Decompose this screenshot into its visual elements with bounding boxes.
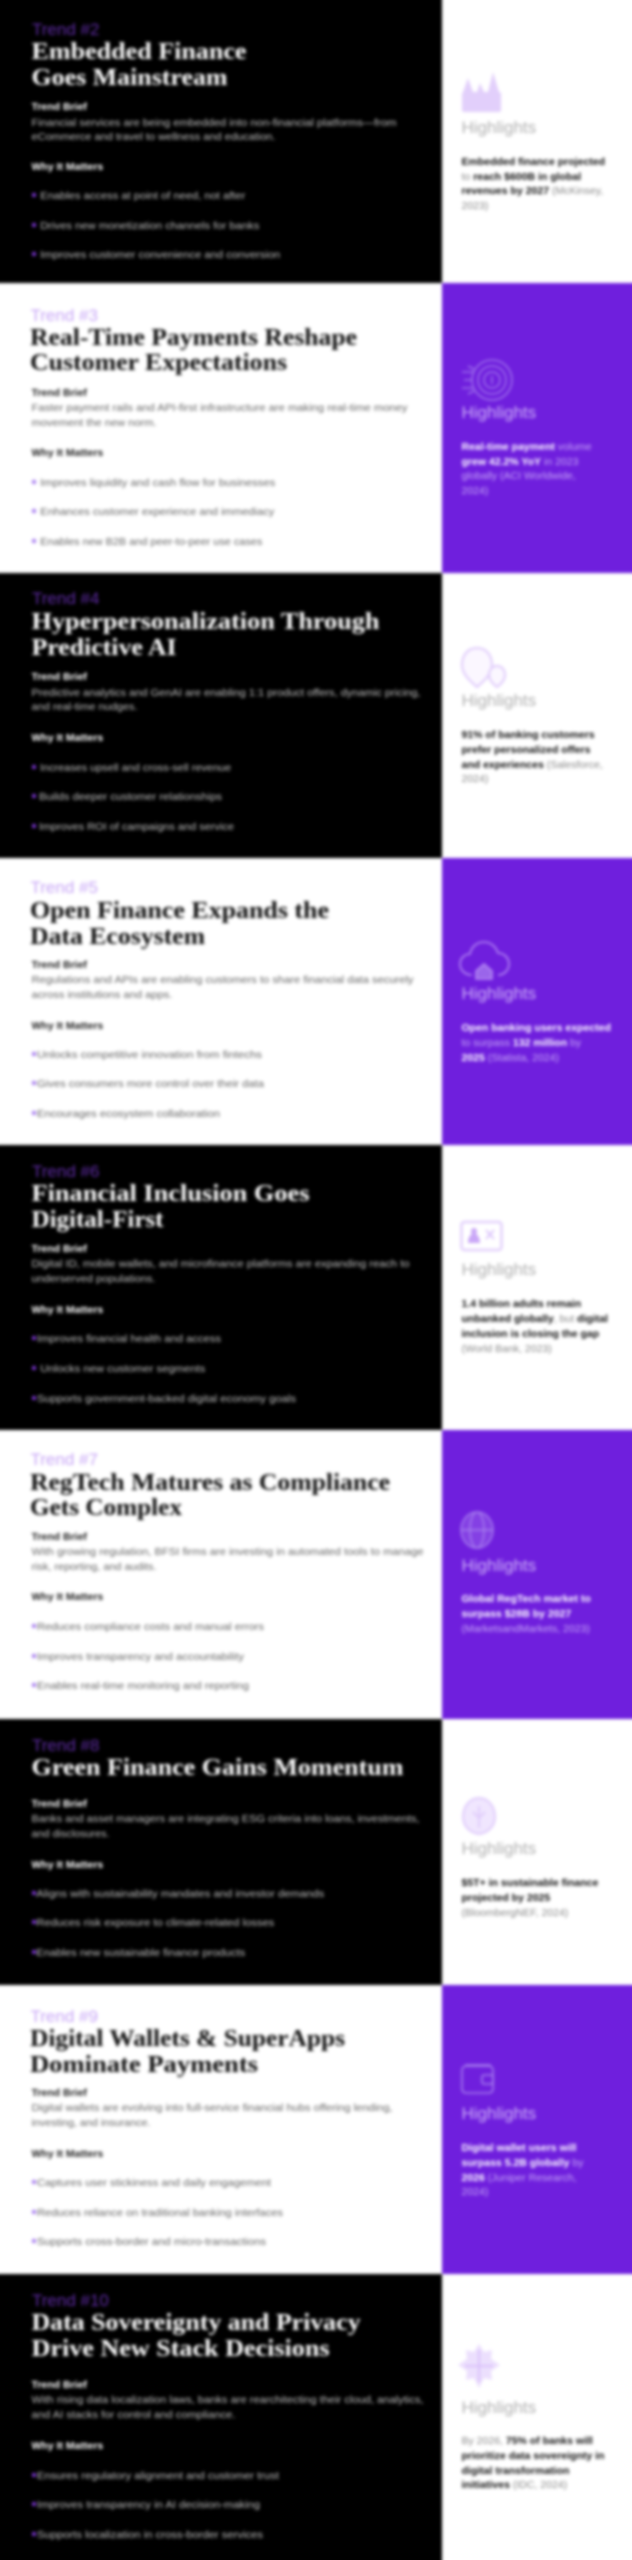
icon: id card <box>462 1222 502 1250</box>
trend 4 why it matters <box>32 732 234 833</box>
trend 7 heading: Gets Complex <box>30 1495 182 1521</box>
trend 7 why it matters <box>32 1591 264 1692</box>
highlights stat <box>462 1298 608 1355</box>
icon: location pins <box>462 648 505 687</box>
icon: cloud with house <box>460 942 509 979</box>
highlights stat: revenues by 2027 (McKinsey, <box>462 185 603 197</box>
highlights stat: prefer personalized offers <box>462 744 591 756</box>
icon: shield globe <box>461 1512 493 1548</box>
highlights label: Highlights <box>462 984 536 1003</box>
trend 5 brief <box>32 959 414 1001</box>
trend 6 heading <box>32 1181 310 1233</box>
trend 4 brief: Trend Brief <box>32 671 87 683</box>
panel: highlights 6 <box>442 1145 632 1430</box>
trend 3 label: Trend #3 <box>30 306 98 325</box>
panel: trend 6 <box>0 1145 442 1430</box>
highlights stat: projected by 2025 <box>462 1892 550 1904</box>
trend 10 heading: Drive New Stack Decisions <box>32 2336 330 2362</box>
trend 6 why it matters: Why It Matters <box>32 1304 103 1316</box>
trend 10 brief: and AI stacks for control and compliance. <box>32 2409 236 2421</box>
highlights stat: Open banking users expected <box>462 1022 611 1034</box>
trend 3 heading: Real-Time Payments Reshape <box>30 325 357 351</box>
trend 7 heading <box>30 1470 390 1521</box>
highlights label: Highlights <box>462 1260 536 1279</box>
trend 8 label: Trend #8 <box>32 1736 99 1755</box>
highlights stat: 2026 (Juniper Research, <box>462 2172 576 2184</box>
trend 8 brief: and disclosures. <box>32 1828 110 1840</box>
highlights label: Highlights <box>462 1556 536 1575</box>
trend 10 label: Trend #10 <box>32 2291 109 2310</box>
trend 5 why it matters: Unlocks competitive innovation from fintechs <box>37 1049 262 1061</box>
highlights stat: globally (ACI Worldwide, <box>462 470 576 482</box>
highlights label: Highlights <box>462 1839 536 1858</box>
trend 6 why it matters: Unlocks new customer segments <box>40 1363 205 1375</box>
highlights label: Highlights <box>462 691 536 710</box>
trend 4 brief: Predictive analytics and GenAI are enabling 1:1 product offers, dynamic pricing, <box>32 687 420 699</box>
trend 8 brief <box>32 1798 420 1840</box>
trend 7 brief <box>32 1531 424 1573</box>
highlights label: Highlights <box>462 2398 536 2417</box>
highlights stat: (BloombergNEF, 2024) <box>462 1907 568 1919</box>
trend 7 why it matters: Why It Matters <box>32 1591 103 1603</box>
trend 3 heading <box>30 325 357 376</box>
trend 10 brief: Trend Brief <box>32 2379 87 2391</box>
trend 8 why it matters <box>32 1859 324 1959</box>
trend 7 why it matters: Improves transparency and accountability <box>37 1651 245 1663</box>
trend 9 brief: Digital wallets are evolving into full-service financial hubs offering lending, <box>32 2102 393 2114</box>
panel: trend 10 <box>0 2274 442 2560</box>
trend 6 why it matters: Improves financial health and access <box>37 1333 221 1345</box>
trend 9 heading: Dominate Payments <box>30 2052 258 2078</box>
trend 9 heading <box>30 2026 345 2078</box>
trend 2 brief <box>32 101 397 143</box>
trend 5 heading <box>30 898 329 950</box>
highlights stat: Digital wallet users will <box>462 2142 577 2154</box>
icon: network star <box>458 2344 500 2388</box>
highlights stat: inclusion is closing the gap <box>462 1328 599 1340</box>
trend 8 heading: Green Finance Gains Momentum <box>32 1755 404 1781</box>
highlights label: Highlights <box>462 2104 536 2123</box>
trend 3 why it matters: Why It Matters <box>32 447 103 459</box>
trend 7 heading: RegTech Matures as Compliance <box>30 1470 390 1496</box>
trend 5 heading: Open Finance Expands the <box>30 898 329 924</box>
trend 6 brief: Trend Brief <box>32 1243 87 1255</box>
highlights stat <box>462 2435 604 2491</box>
highlights stat <box>462 2142 584 2198</box>
trend 2 heading: Goes Mainstream <box>32 65 228 91</box>
trend 6 brief: Digital ID, mobile wallets, and microfinance platforms are expanding reach to <box>32 1258 410 1270</box>
trend 3 brief: Faster payment rails and API-first infrastructure are making real-time money <box>32 402 408 414</box>
trend 7 brief: With growing regulation, BFSI firms are investing in automated tools to manage <box>32 1546 424 1558</box>
highlights stat: $5T+ in sustainable finance <box>462 1877 598 1889</box>
trend 9 why it matters: Supports cross-border and micro-transactions <box>37 2236 266 2248</box>
trend 9 why it matters: Reduces reliance on traditional banking interfaces <box>37 2207 283 2219</box>
trend 7 why it matters: Reduces compliance costs and manual errors <box>37 1621 264 1633</box>
trend 2 why it matters: Enables access at point of need, not after <box>40 190 246 202</box>
trend 6 heading: Digital-First <box>32 1207 164 1233</box>
trend 10 why it matters: Why It Matters <box>32 2440 103 2452</box>
trend 8 why it matters: Why It Matters <box>32 1859 103 1871</box>
trend 2 why it matters: Why It Matters <box>32 161 103 173</box>
highlights stat <box>462 156 605 212</box>
panel: trend 8 <box>0 1719 442 1985</box>
highlights stat <box>462 729 603 785</box>
trend 2 why it matters: Drives new monetization channels for banks <box>40 220 259 232</box>
trend 10 why it matters <box>32 2440 279 2541</box>
highlights stat: to surpass 132 million by <box>462 1037 582 1049</box>
trend 6 label: Trend #6 <box>32 1162 99 1181</box>
highlights stat: Real-time payment volume <box>462 441 592 453</box>
trend 3 heading: Customer Expectations <box>30 350 287 376</box>
trend 9 brief: Trend Brief <box>32 2087 87 2099</box>
panel: highlights 3 <box>442 283 632 573</box>
trend 4 brief <box>32 671 420 713</box>
trend 9 label: Trend #9 <box>30 2007 98 2026</box>
trend 5 brief: across institutions and apps. <box>32 989 172 1001</box>
trend 3 why it matters <box>32 447 275 548</box>
trend 3 brief: Trend Brief <box>32 387 87 399</box>
trend 2 heading <box>32 39 247 91</box>
highlights stat: (World Bank, 2023) <box>462 1343 552 1355</box>
trend 8 why it matters: Reduces risk exposure to climate-related losses <box>36 1917 274 1929</box>
trend 6 brief: underserved populations. <box>32 1273 156 1285</box>
trend 4 brief: and real-time nudges. <box>32 701 138 713</box>
trend 10 why it matters: Improves transparency in AI decision-making <box>37 2499 260 2511</box>
panel: highlights 5 <box>442 858 632 1145</box>
highlights stat: 91% of banking customers <box>462 729 595 741</box>
trend 4 label: Trend #4 <box>32 589 99 608</box>
panel: highlights 8 <box>442 1719 632 1985</box>
trend 3 why it matters: Improves liquidity and cash flow for businesses <box>40 477 275 489</box>
trend 8 brief: Banks and asset managers are integrating ESG criteria into loans, investments, <box>32 1813 420 1825</box>
panel: trend 4 <box>0 573 442 858</box>
trend 3 why it matters: Enables new B2B and peer-to-peer use cases <box>40 536 262 548</box>
panel: highlights 7 <box>442 1430 632 1719</box>
trend 7 brief: Trend Brief <box>32 1531 87 1543</box>
trend 4 heading: Predictive AI <box>32 635 176 661</box>
trend 2 brief: eCommerce and travel to wellness and education. <box>32 131 276 143</box>
trend 10 heading <box>32 2310 361 2362</box>
trend 8 brief: Trend Brief <box>32 1798 87 1810</box>
trend 7 brief: risk, reporting, and audits. <box>32 1561 156 1573</box>
trend 9 why it matters: Why It Matters <box>32 2148 103 2160</box>
trend 4 why it matters: Improves ROI of campaigns and service <box>39 821 234 833</box>
trend 3 brief: movement the new norm. <box>32 417 156 429</box>
highlights stat: Embedded finance projected <box>462 156 605 168</box>
trend 2 why it matters: Improves customer convenience and conversion <box>40 249 280 261</box>
trend 2 heading: Embedded Finance <box>32 39 247 65</box>
panel: trend 9 <box>0 1985 442 2274</box>
trend 8 why it matters: Aligns with sustainability mandates and investor demands <box>36 1888 324 1900</box>
highlights stat: 2023) <box>462 200 488 212</box>
trend 5 brief: Trend Brief <box>32 959 87 971</box>
highlights stat: digital transformation <box>462 2465 569 2477</box>
trend 3 brief <box>32 387 408 429</box>
highlights stat: and experiences (Salesforce, <box>462 759 603 771</box>
trend 2 brief: Trend Brief <box>32 101 87 113</box>
highlights stat: By 2026, 75% of banks will <box>462 2435 593 2447</box>
trend 2 label: Trend #2 <box>32 20 99 39</box>
highlights stat: Global RegTech market to <box>462 1593 591 1605</box>
panel: highlights 9 <box>442 1985 632 2274</box>
trend 9 brief: investing, and insurance. <box>32 2117 150 2129</box>
trend 7 label: Trend #7 <box>30 1450 98 1469</box>
trend 5 why it matters: Gives consumers more control over their data <box>37 1078 264 1090</box>
panel: trend 3 <box>0 283 442 573</box>
trend 9 brief <box>32 2087 393 2129</box>
panel: trend 5 <box>0 858 442 1145</box>
icon: buildings chart <box>462 72 501 112</box>
highlights stat: prioritize data sovereignty in <box>462 2450 604 2462</box>
panel: highlights 2 <box>442 0 632 283</box>
icon: coin with speed lines <box>462 360 512 400</box>
trend 5 heading: Data Ecosystem <box>30 924 205 950</box>
trend 2 why it matters <box>32 161 280 261</box>
icon: wallet <box>462 2065 493 2093</box>
highlights stat <box>462 441 592 497</box>
highlights label: Highlights <box>462 403 536 422</box>
trend 9 why it matters <box>32 2148 283 2248</box>
highlights stat: 2024) <box>462 485 488 497</box>
highlights stat: 1.4 billion adults remain <box>462 1298 581 1310</box>
trend 4 why it matters: Increases upsell and cross-sell revenue <box>40 762 231 774</box>
highlights stat: initiatives (IDC, 2024) <box>462 2479 567 2491</box>
highlights stat <box>462 1877 598 1919</box>
trend 9 heading: Digital Wallets & SuperApps <box>30 2026 345 2052</box>
trend 5 brief: Regulations and APIs are enabling customers to share financial data securely <box>32 974 414 986</box>
trend 4 why it matters: Builds deeper customer relationships <box>39 791 222 803</box>
panel: highlights 4 <box>442 573 632 858</box>
trend 10 brief: With rising data localization laws, banks are rearchitecting their cloud, analytics, <box>32 2394 424 2406</box>
highlights stat: to reach $600B in global <box>462 171 581 183</box>
highlights stat: surpass $28B by 2027 <box>462 1608 571 1620</box>
panel: trend 7 <box>0 1430 442 1719</box>
trend 10 why it matters: Supports localization in cross-border services <box>37 2529 263 2541</box>
highlights label: Highlights <box>462 118 536 137</box>
trend 6 brief <box>32 1243 410 1285</box>
trend 7 why it matters: Enables real-time monitoring and reporting <box>37 1680 249 1692</box>
trend 5 label: Trend #5 <box>30 878 98 897</box>
icon: leaf <box>463 1798 495 1834</box>
trend 6 heading: Financial Inclusion Goes <box>32 1181 310 1207</box>
trend 5 why it matters <box>32 1020 264 1120</box>
trend 9 why it matters: Captures user stickiness and daily engagement <box>37 2177 271 2189</box>
highlights stat: unbanked globally, but digital <box>462 1313 608 1325</box>
trend 6 why it matters: Supports government-backed digital economy goals <box>37 1393 296 1405</box>
highlights stat: 2024) <box>462 773 488 785</box>
trend 10 heading: Data Sovereignty and Privacy <box>32 2310 361 2336</box>
trend 6 why it matters <box>32 1304 296 1405</box>
trend 5 why it matters: Why It Matters <box>32 1020 103 1032</box>
trend 5 why it matters: Encourages ecosystem collaboration <box>37 1108 220 1120</box>
highlights stat: grew 42.2% YoY in 2023 <box>462 456 579 468</box>
trend 4 heading <box>32 609 380 661</box>
panel: highlights 10 <box>442 2274 632 2560</box>
trend 3 why it matters: Enhances customer experience and immediacy <box>40 506 275 518</box>
highlights stat: 2024) <box>462 2186 488 2198</box>
trend 4 heading: Hyperpersonalization Through <box>32 609 380 635</box>
highlights stat: (MarketsandMarkets, 2023) <box>462 1623 590 1635</box>
trend 10 why it matters: Ensures regulatory alignment and customer trust <box>37 2470 279 2482</box>
highlights stat <box>462 1022 611 1064</box>
trend 4 why it matters: Why It Matters <box>32 732 103 744</box>
highlights stat: 2025 (Statista, 2024) <box>462 1052 559 1064</box>
panel: trend 2 <box>0 0 442 283</box>
trend 2 brief: Financial services are being embedded into non-financial platforms—from <box>32 117 397 129</box>
trend 8 why it matters: Enables new sustainable finance products <box>36 1947 245 1959</box>
highlights stat <box>462 1593 591 1635</box>
trend 10 brief <box>32 2379 424 2421</box>
highlights stat: surpass 5.2B globally by <box>462 2157 584 2169</box>
